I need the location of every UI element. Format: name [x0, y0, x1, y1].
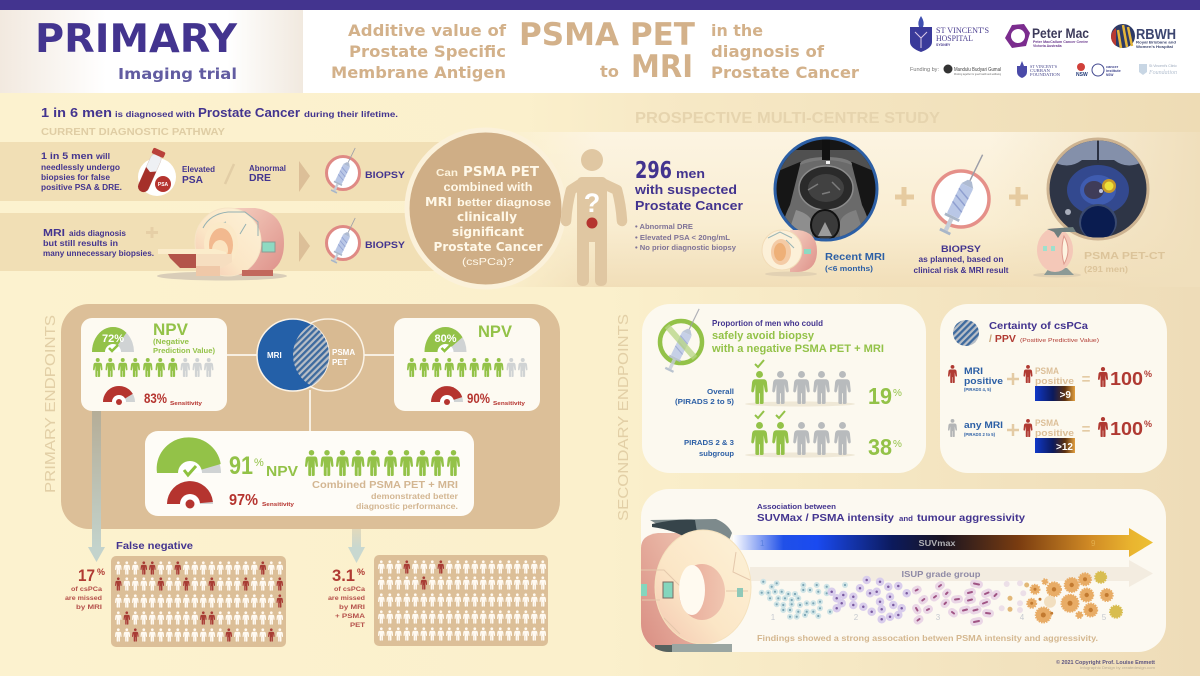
people: 10 of 10 [305, 450, 460, 476]
heading: primary endpoints: PRIMARY ENDPOINTS [42, 315, 59, 493]
cells: grade 5: 5 [1102, 613, 1107, 622]
pathway text 2: but still results in [43, 239, 118, 248]
study title: Prostate Specific [349, 42, 506, 61]
conclusion text [312, 480, 458, 511]
equation: any MRI: (PIRADS 2 to 5) [964, 432, 995, 438]
cells: grade 3: 3 [936, 613, 941, 622]
NPV label: NPV [153, 320, 189, 339]
trial name: PRIMARY [35, 17, 238, 62]
cells: grade 4 [1002, 583, 1027, 622]
patient figure: ? [584, 188, 600, 218]
funding logos: NSW [1076, 72, 1088, 78]
cells: grade 1: 1 [771, 613, 776, 622]
copyright [1056, 659, 1155, 670]
icon: small PET scanner [1033, 227, 1081, 278]
arrow [299, 161, 310, 192]
row: overall [675, 360, 902, 409]
gauge: NPV 91% [157, 437, 221, 475]
equation: MRI positive: = [1082, 371, 1091, 388]
conclusion text: Combined PSMA PET + MRI [312, 480, 458, 491]
missed by MRI + PET: 3.1 [332, 566, 355, 585]
gauge: NPV 72% [92, 327, 134, 352]
arrow: ISUP grade group [750, 560, 1153, 587]
NPV value: 91 [229, 452, 253, 480]
funding logos: NSW [1106, 73, 1113, 77]
heading: (Positive Predictive Value) [1020, 338, 1099, 344]
icon: biopsy needle [326, 216, 360, 264]
PSA / DRE labels [182, 164, 286, 186]
pathway row 2 [0, 208, 480, 280]
central question circle: significant [452, 225, 524, 239]
row: PIRADS 2 and 3: % [893, 439, 902, 450]
row: overall: (PIRADS 2 to 5) [675, 397, 735, 406]
cells: grade 2: 2 [854, 613, 859, 622]
study population: • No prior diagnostic biopsy [635, 243, 737, 252]
study population [634, 158, 743, 252]
icon: blood tube [135, 147, 176, 196]
card: MRI NPV [81, 318, 227, 411]
equation: MRI positive [948, 365, 1152, 401]
heading: current pathway: CURRENT DIAGNOSTIC PATHWAY [41, 126, 225, 138]
cell illustration: grade 1 to 5 [762, 572, 1122, 622]
equation: MRI positive: MRI [964, 366, 983, 377]
logo: Peter Mac: Peter Mac [1032, 26, 1089, 41]
funding logos: CURRAN [1030, 69, 1050, 73]
pathway text 1: positive PSA & DRE. [41, 183, 122, 192]
header [0, 10, 1200, 93]
PSA / DRE labels: DRE [249, 173, 271, 184]
incidence statement [41, 105, 398, 120]
study title: Additive value of [348, 21, 507, 40]
connector lines [227, 355, 394, 431]
missed by MRI + PET [328, 566, 366, 629]
row: PIRADS 2 and 3: 38 [868, 434, 892, 460]
study title: PSMA PET [519, 17, 695, 53]
trial name: Imaging trial [118, 65, 237, 83]
logo: Peter Mac: Peter MacCallum Cancer Centre [1033, 40, 1088, 44]
logo: St Vincent's Hospital: SYDNEY [936, 43, 951, 47]
PSA / DRE labels: Elevated [182, 165, 215, 174]
biopsy label: BIOPSY [365, 170, 406, 181]
pathway text 2: MRI [43, 228, 65, 239]
icon: hatched circle [953, 320, 979, 346]
sensitivity value: 83% [144, 390, 167, 406]
missed by MRI + PET: + PSMA [335, 613, 365, 620]
logo: RBWH [1111, 24, 1177, 49]
copyright: Infographic Design by createdesign.com [1080, 666, 1155, 670]
heading: and [899, 514, 913, 523]
panel: avoid biopsy [642, 304, 926, 473]
incidence statement: 1 in 6 men [41, 105, 112, 120]
missed by MRI: by MRI [76, 604, 102, 611]
heading: secondary endpoints: SECONDARY ENDPOINTS [615, 314, 632, 521]
row: PIRADS 2 and 3: PIRADS 2 & 3 [684, 438, 734, 447]
missed by MRI + PET: by MRI [339, 604, 365, 611]
NPV label [153, 320, 216, 355]
gauge: sensitivity 83% [103, 386, 135, 405]
row: PIRADS 2 and 3: subgroup [699, 449, 734, 458]
MRI label: Recent MRI [825, 251, 885, 263]
heading: Proportion of men who could [712, 318, 823, 328]
pathway text 1: will [95, 152, 110, 161]
missed by MRI [65, 566, 105, 611]
central question circle: combined with [444, 182, 532, 194]
PET scan image [1048, 139, 1148, 240]
heading: Certainty of csPCa [989, 320, 1088, 332]
equation: any MRI: = [1082, 421, 1091, 438]
central question circle: clinically [457, 210, 517, 224]
pathway text 2: many unnecessary biopsies. [43, 249, 154, 258]
missed by MRI: of csPCa [71, 586, 102, 593]
equation: any MRI: PSMA [1035, 418, 1059, 429]
funding logos: Working together for good health and wellbeing [954, 72, 1001, 76]
central question circle: MRI [425, 194, 452, 209]
plus [1009, 187, 1028, 206]
missed by MRI + PET: of csPCa [334, 586, 365, 593]
study population: • Abnormal DRE [635, 222, 693, 231]
card: PET NPV [394, 318, 540, 411]
logo: St Vincent's Hospital: ST VINCENT'S [936, 25, 989, 35]
false negative label: False negative [116, 541, 193, 552]
NPV value [229, 452, 298, 480]
NPV label: Prediction Value) [153, 346, 216, 355]
icon: biopsy needle [326, 146, 360, 194]
sensitivity value: Sensitivity [262, 502, 294, 508]
illustration: PET scanner [641, 519, 751, 652]
missed by MRI: % [97, 567, 105, 577]
NPV value: NPV [266, 463, 298, 480]
icon: MRI scanner [157, 208, 287, 280]
heading [757, 502, 1025, 524]
study title: to [600, 62, 619, 81]
arrow: SUVmax gradient [733, 528, 1153, 557]
funding logos: Funding by: [910, 67, 939, 73]
biopsy description [914, 244, 1009, 275]
missed by MRI + PET: are missed [328, 595, 365, 602]
funding logos: Foundation [1148, 70, 1177, 76]
equation: any MRI: >12 [1056, 442, 1073, 453]
study title: Prostate Cancer [711, 63, 859, 82]
study title: Membrane Antigen [331, 63, 506, 82]
card: combined [145, 431, 474, 516]
study title: MRI [631, 49, 693, 85]
venn diagram [257, 319, 364, 391]
central question circle: Prostate Cancer [434, 240, 543, 254]
sensitivity value [467, 390, 525, 407]
MRI scan image [775, 138, 877, 240]
biopsy description: clinical risk & MRI result [914, 266, 1009, 275]
heading: SUVMax / PSMA intensity [757, 512, 894, 524]
sensitivity value: 97% [229, 492, 258, 509]
central question circle: Can [436, 167, 458, 179]
central question circle [407, 130, 564, 287]
study title: in the [711, 21, 763, 40]
study population: 296 [635, 158, 672, 184]
PSA / DRE labels: Abnormal [249, 164, 286, 173]
cells: grade 4: 4 [1020, 613, 1025, 622]
biopsy description: as planned, based on [918, 255, 1004, 264]
sensitivity value: Sensitivity [493, 401, 525, 407]
icon: biopsy [933, 151, 990, 236]
missed by MRI + PET: % [357, 567, 365, 577]
panel: primary endpoints [61, 304, 560, 563]
central question circle: PSMA PET [463, 165, 539, 180]
cells: grade 2 [832, 580, 907, 622]
funding logos: institute [1106, 69, 1121, 73]
row: overall: Overall [707, 387, 734, 396]
row: overall: 19 [868, 383, 892, 409]
sensitivity value: Sensitivity [170, 401, 202, 407]
funding logos: cancer [1106, 65, 1119, 69]
equation: any MRI: positive [1035, 428, 1074, 439]
heading: / PPV [989, 333, 1016, 345]
trial name [35, 17, 238, 83]
copyright: © 2021 Copyright Prof. Louise Emmett [1056, 659, 1155, 666]
venn diagram: PET [332, 358, 348, 367]
patient figure [566, 149, 622, 286]
incidence statement: Prostate Cancer [198, 105, 300, 120]
study title: diagnosis of [711, 42, 825, 61]
arrow: SUVmax gradient: SUVmax [918, 538, 956, 548]
sensitivity value: 90% [467, 390, 490, 406]
icon: blood tube: PSA [158, 182, 169, 188]
logo: RBWH: Royal Brisbane and [1136, 40, 1177, 44]
people grid: MRI false negatives [111, 556, 286, 647]
pathway text 2 [43, 228, 154, 258]
heading: with a negative PSMA PET + MRI [711, 343, 884, 355]
study population: Prostate Cancer [635, 198, 743, 213]
sensitivity value [144, 390, 202, 407]
conclusion text: diagnostic performance. [356, 502, 458, 511]
people: 8 of 10 [407, 358, 528, 377]
gauge: NPV 72%: 72% [102, 333, 124, 345]
equation: MRI positive: PSMA [1035, 366, 1059, 377]
equation: MRI positive: positive [964, 376, 1003, 387]
funding logos: FOUNDATION [1030, 73, 1060, 77]
logo: Peter Mac [1005, 24, 1089, 48]
funding logos: Mandulu Budyari Gumal [954, 67, 1001, 73]
gauge: NPV 80%: 80% [434, 333, 457, 345]
logo: Peter Mac: Victoria Australia [1033, 44, 1062, 48]
study population: • Elevated PSA < 20ng/mL [635, 233, 730, 242]
equation: MRI positive: 100 [1110, 368, 1143, 389]
right band study [500, 132, 1200, 287]
biopsy label: BIOPSY [365, 240, 406, 251]
biopsy description: BIOPSY [941, 244, 982, 255]
logo: RBWH: Women's Hospital [1136, 44, 1173, 49]
funding logos: ST VINCENT'S [1030, 65, 1057, 69]
cells: grade 1 [762, 582, 845, 622]
sensitivity value [229, 492, 294, 509]
heading: safely avoid biopsy [712, 330, 815, 342]
MRI label: (<6 months) [825, 264, 874, 273]
findings text: Findings showed a strong assocation betwen PSMA intensity and aggressivity. [757, 633, 1098, 643]
equation: any MRI: % [1144, 419, 1152, 429]
equation: any MRI: any MRI [964, 420, 1003, 431]
gauge: NPV 80% [424, 327, 466, 352]
top bar [0, 0, 1200, 10]
funding logos: St Vincent's Clinic [1149, 64, 1177, 68]
logo: St Vincent's Hospital: HOSPITAL [936, 33, 973, 43]
gauge: sensitivity 97% [167, 481, 213, 508]
heading: tumour aggressivity [917, 512, 1025, 524]
arrow [299, 231, 310, 262]
NPV value: % [254, 457, 264, 469]
central question circle: better diagnose [457, 197, 551, 209]
panel: certainty of csPCa [940, 304, 1167, 473]
logo: St Vincent's Hospital [910, 16, 989, 52]
PET label [1084, 250, 1166, 274]
people: 7 of 10 [93, 358, 214, 377]
incidence statement: is diagnosed with [115, 109, 195, 119]
equation: MRI positive: % [1144, 369, 1152, 379]
equation: MRI positive: positive [1035, 376, 1074, 387]
pathway text 1 [41, 151, 122, 192]
heading [711, 318, 884, 355]
icon: small MRI scanner [762, 230, 817, 276]
logo: RBWH: RBWH [1136, 26, 1176, 43]
equation: MRI positive: (PIRADS 4, 5) [964, 387, 991, 393]
NPV label: NPV [478, 322, 513, 341]
arrow: SUVmax gradient: 9 [1091, 539, 1096, 548]
plus [146, 227, 158, 238]
cells: grade 3 [916, 584, 996, 622]
incidence statement: during their lifetime. [304, 109, 398, 119]
cells: grade 5 [1027, 572, 1122, 622]
heading [989, 320, 1099, 345]
right band top [520, 93, 1200, 132]
panel: association [641, 489, 1166, 652]
NPV label: (Negative [153, 337, 189, 346]
heading: prospective study: PROSPECTIVE MULTI-CENTRE STUDY [635, 110, 941, 127]
plus [895, 187, 914, 206]
equation: any MRI [948, 417, 1152, 453]
missed by MRI: are missed [65, 595, 102, 602]
pathway row 1 [0, 142, 480, 201]
arrow: combined false negative [348, 529, 365, 563]
central question circle: (csPCa)? [462, 257, 515, 268]
icon: crossed syringe [660, 306, 705, 374]
MRI label [825, 251, 885, 273]
PET label: PSMA PET-CT [1084, 250, 1166, 262]
heading: Association between [757, 502, 836, 511]
venn diagram: MRI [267, 351, 282, 360]
conclusion text: demonstrated better [371, 492, 458, 501]
missed by MRI: 17 [78, 566, 95, 585]
study population: with suspected [634, 182, 737, 197]
equation: MRI positive: >9 [1060, 390, 1071, 401]
study population: men [676, 166, 705, 181]
arrow: MRI false negative [88, 411, 105, 562]
gauge: sensitivity 90% [431, 386, 463, 405]
PET label: (291 men) [1084, 264, 1128, 274]
people grid: combined false negatives [374, 555, 548, 646]
pathway text 1: 1 in 5 men [41, 151, 93, 162]
pathway text 2: aids diagnosis [69, 229, 127, 238]
study title [331, 17, 859, 85]
equation: any MRI: 100 [1110, 418, 1143, 439]
pathway text 1: needlessly undergo [41, 163, 120, 172]
arrow: ISUP grade group: ISUP grade group [902, 569, 980, 579]
row: overall: % [893, 388, 902, 399]
venn diagram: PSMA [332, 348, 355, 357]
missed by MRI + PET: PET [350, 622, 366, 629]
arrow: SUVmax gradient: 1 [760, 539, 765, 548]
PSA / DRE labels: PSA [182, 175, 203, 186]
pathway text 1: biopsies for false [41, 173, 111, 182]
funding logos [910, 61, 1177, 78]
row: PIRADS 2 and 3 [684, 411, 902, 460]
